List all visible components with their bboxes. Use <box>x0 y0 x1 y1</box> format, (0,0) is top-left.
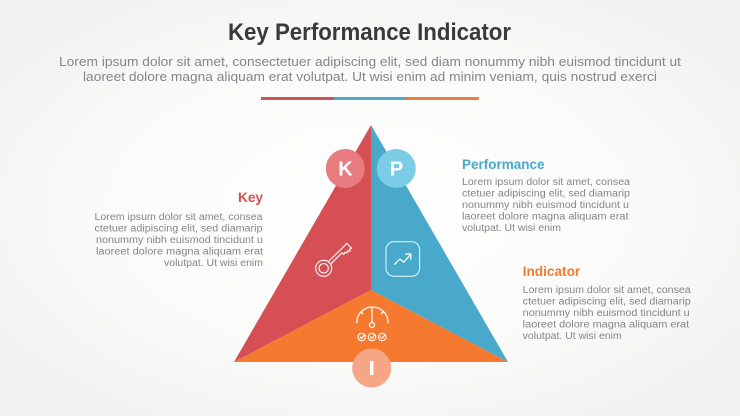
heading: performance: Performance <box>462 156 545 172</box>
badge: I <box>352 348 391 388</box>
body: key: Lorem ipsum dolor sit amet, consea <box>94 212 263 223</box>
heading: indicator: Indicator <box>523 263 581 279</box>
heading: key: Key <box>238 189 263 205</box>
text block: performance <box>462 156 630 234</box>
body: performance: laoreet dolore magna aliquam erat <box>462 212 629 222</box>
body: indicator: laoreet dolore magna aliquam erat <box>523 320 689 330</box>
subtitle text <box>59 54 681 84</box>
body: performance: volutpat. Ut wisi enim <box>462 223 561 234</box>
body: indicator: Lorem ipsum dolor sit amet, consea <box>523 285 691 296</box>
subtitle text: laoreet dolore magna aliquam erat volutpat. Ut wisi enim ad minim veniam, quis nostrud exerci <box>83 69 657 84</box>
body: performance <box>462 177 630 234</box>
body: key: ctetuer adipiscing elit, sed diamarip <box>94 224 263 234</box>
body: performance: nonummy nibh euismod tincidunt u <box>462 200 629 211</box>
text block: key <box>94 189 263 269</box>
badge: P: P <box>390 158 403 180</box>
icon: trend chart <box>386 242 420 276</box>
text block: indicator <box>523 263 691 342</box>
body: key: nonummy nibh euismod tincidunt u <box>96 235 263 246</box>
badge: K <box>326 149 365 188</box>
body: performance: Lorem ipsum dolor sit amet, consea <box>462 177 630 188</box>
subtitle text: Lorem ipsum dolor sit amet, consectetuer adipiscing elit, sed diam nonummy nibh euismod tincidunt ut <box>59 54 681 69</box>
icon: key <box>316 243 352 276</box>
title: Key Performance Indicator <box>228 19 511 46</box>
tricolor divider <box>261 97 479 100</box>
body: indicator <box>523 285 691 342</box>
body: indicator: ctetuer adipiscing elit, sed diamarip <box>523 296 691 308</box>
pyramid diagram <box>234 125 508 388</box>
segment: key (red) <box>234 125 371 362</box>
badge: K: K <box>338 158 353 180</box>
icon: gauge with checks <box>357 307 388 341</box>
segment: indicator (orange) <box>234 290 508 362</box>
badge: P <box>377 149 416 188</box>
body: indicator: volutpat. Ut wisi enim <box>523 331 622 342</box>
segment: performance (blue) <box>371 125 508 362</box>
body: performance: ctetuer adipiscing elit, sed diamarip <box>462 188 630 200</box>
body: key: volutpat. Ut wisi enim <box>164 258 263 269</box>
body: indicator: nonummy nibh euismod tincidunt u <box>523 308 690 319</box>
body: key <box>94 212 263 269</box>
body: key: laoreet dolore magna aliquam erat <box>96 246 263 258</box>
